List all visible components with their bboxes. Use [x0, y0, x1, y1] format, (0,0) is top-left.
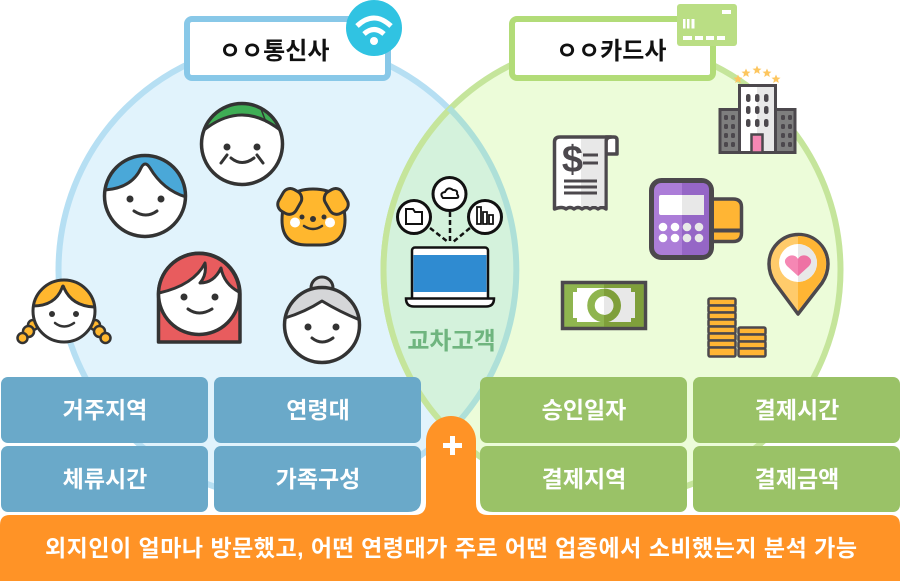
- attribute box: age group: 연령대: [286, 397, 350, 423]
- icon: location pin with heart: [769, 235, 828, 314]
- attribute box: stay time: 체류시간: [63, 466, 147, 492]
- attribute box: residence area: [1, 377, 208, 443]
- icon: hotel building: [720, 66, 795, 152]
- icon: dog face: [275, 186, 351, 245]
- venn overlap region: [380, 106, 520, 421]
- venn circle: card customers: [384, 42, 840, 498]
- icon: coin stacks: [708, 298, 766, 356]
- summary bar with plus tab: 외지인이 얼마나 방문했고, 어떤 연령대가 주로 어떤 업종에서 소비했는지 분석 가능: [45, 535, 857, 561]
- icon: red hair woman face: [156, 252, 242, 344]
- attribute box: family composition: 가족구성: [276, 466, 360, 492]
- attribute box: payment amount: 결제금액: [755, 466, 839, 492]
- attribute box: payment area: [480, 446, 687, 512]
- icon: wifi badge: [346, 0, 402, 56]
- heading: card company: ㅇㅇ카드사: [556, 38, 666, 65]
- venn circle: telecom customers: [58, 42, 516, 498]
- icon: girl with braids face: [18, 275, 110, 343]
- attribute box: stay time: [1, 446, 208, 512]
- label: cross customers: 교차고객: [407, 328, 496, 355]
- icon: receipt: [554, 137, 617, 209]
- icon: laptop with cloud services: [398, 178, 502, 306]
- icon: payment terminal and card: [652, 180, 742, 258]
- heading: telecom company: [187, 19, 388, 78]
- attribute box: residence area: 거주지역: [63, 397, 147, 423]
- icon: receipt: $: [562, 139, 583, 181]
- summary bar with plus tab: [0, 416, 900, 581]
- icon: blue hair person face: [102, 154, 188, 238]
- icon: banknote: [562, 282, 646, 328]
- attribute box: payment area: 결제지역: [542, 466, 626, 492]
- attribute box: payment time: [693, 377, 900, 443]
- attribute box: payment amount: [693, 446, 900, 512]
- attribute box: approval date: [480, 377, 687, 443]
- heading: card company: [512, 19, 713, 78]
- attribute box: payment time: 결제시간: [755, 397, 839, 423]
- attribute box: approval date: 승인일자: [542, 397, 626, 423]
- attribute box: age group: [214, 377, 421, 443]
- icon: green headband man face: [200, 102, 284, 186]
- icon: credit card badge: [677, 4, 737, 46]
- attribute box: family composition: [214, 446, 421, 512]
- icon: grandmother face: [282, 276, 362, 364]
- heading: telecom company: ㅇㅇ통신사: [219, 38, 329, 65]
